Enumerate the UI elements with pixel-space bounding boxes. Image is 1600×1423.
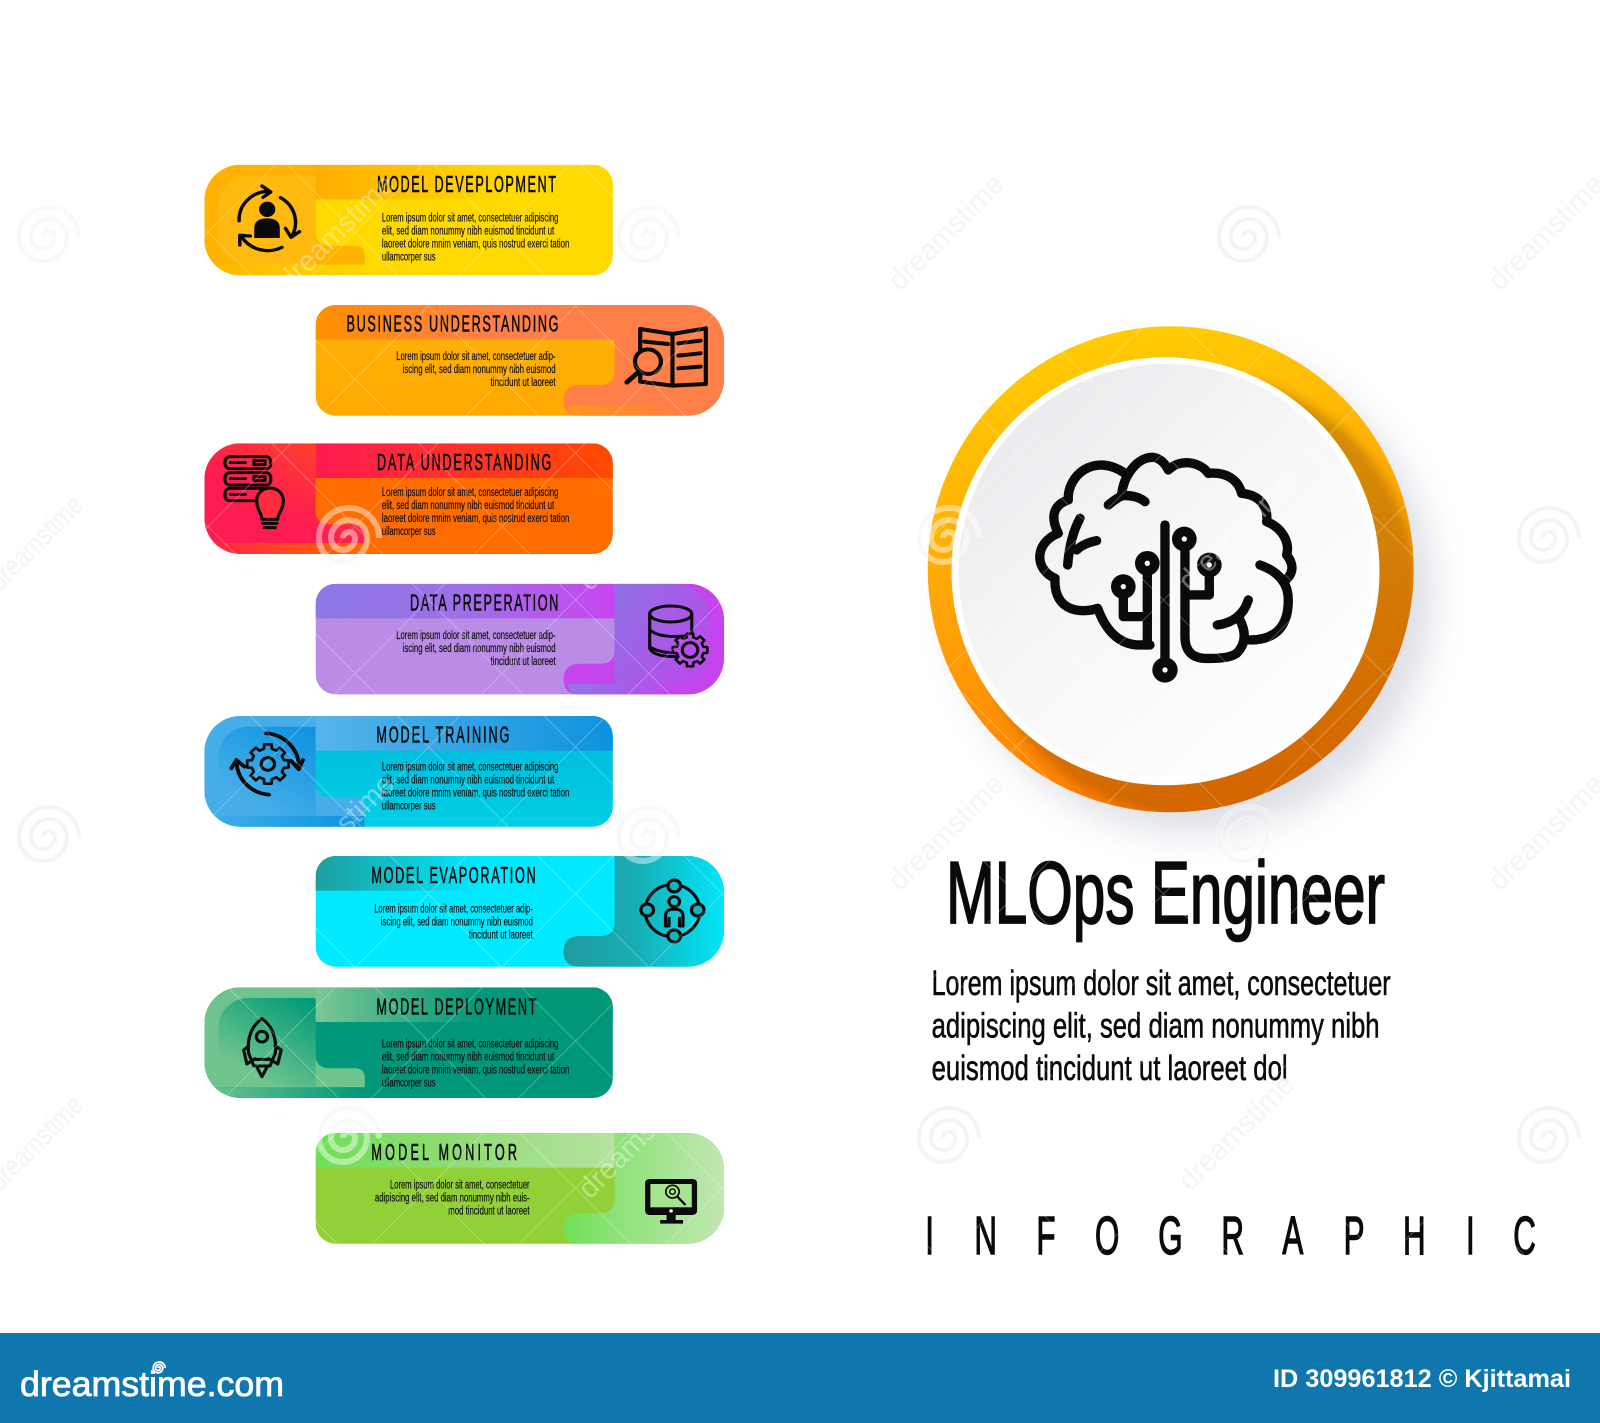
icon: gear with cycle arrows	[231, 733, 303, 795]
text block: laoreet dolore mnim veniam, quis nostrud exerci tation	[382, 1064, 569, 1076]
icon: servers with light bulb	[225, 457, 283, 528]
text: dreamstime	[1172, 1068, 1301, 1197]
heading: MODEL MONITOR	[371, 1139, 517, 1165]
icon: person with connected nodes	[641, 880, 704, 942]
text block: iscing elit, sed diam nonummy nibh euismod	[403, 364, 556, 376]
text: dreamstime	[572, 468, 701, 597]
panel: model deployment	[204, 987, 614, 1098]
text: dreamstime	[1172, 468, 1301, 597]
icon: open book with magnifier	[627, 328, 706, 386]
footer credit: ID 309961812 © Kjittamai	[1273, 1365, 1571, 1393]
text block: ullamcorper sus	[382, 801, 436, 813]
text block	[396, 351, 556, 389]
text block	[374, 903, 533, 941]
circular brain badge	[928, 326, 1432, 832]
text block: tincidunt ut laoreet	[491, 377, 556, 389]
icon: rocket	[244, 1019, 281, 1077]
heading: MODEL EVAPORATION	[371, 862, 536, 888]
text block: elit, sed diam nonummy nibh euismod tincidunt ut	[382, 1051, 555, 1063]
icon: brain with circuit	[1040, 457, 1292, 683]
text block: tincidunt ut laoreet	[491, 656, 556, 668]
text: dreamstime	[572, 1076, 701, 1205]
text block: Lorem ipsum dolor sit amet, consectetuer adipiscing	[382, 213, 558, 225]
description text: euismod tincidunt ut laoreet dol	[932, 1049, 1288, 1088]
footer logo: dreamstime.com	[20, 1365, 284, 1404]
panel: data preperation	[316, 584, 725, 695]
text block: elit, sed diam nonummy nibh euismod tincidunt ut	[382, 775, 555, 787]
panel: model evaporation	[316, 856, 725, 967]
title: MLOps Engineer	[946, 843, 1385, 942]
text block	[382, 487, 569, 538]
icon: monitor with magnifier	[645, 1179, 697, 1224]
panel: data understanding	[204, 443, 614, 554]
description text: Lorem ipsum dolor sit amet, consectetuer	[932, 964, 1391, 1003]
panel: business understanding	[316, 305, 725, 416]
text block	[382, 762, 569, 813]
text block: Lorem ipsum dolor sit amet, consectetuer	[390, 1179, 530, 1191]
footer bar	[0, 1333, 1600, 1423]
text block: ullamcorper sus	[382, 252, 436, 264]
text block	[382, 213, 569, 264]
description text: adipiscing elit, sed diam nonummy nibh	[932, 1006, 1380, 1046]
text block: adipiscing elit, sed diam nonummy nibh euis-	[375, 1192, 530, 1204]
text block: iscing elit, sed diam nonummy nibh euismod	[403, 643, 556, 655]
text: dreamstime	[882, 168, 1011, 297]
heading: MODEL DEPLOYMENT	[376, 993, 536, 1019]
text block: tincidunt ut laoreet	[469, 929, 533, 941]
badge drop shadow	[952, 352, 1432, 832]
badge ring	[928, 326, 1414, 812]
heading: MODEL TRAINING	[376, 722, 509, 748]
text block: Lorem ipsum dolor sit amet, consectetuer adipiscing	[382, 1038, 558, 1050]
text block: laoreet dolore mnim veniam, quis nostrud exerci tation	[382, 513, 569, 525]
icon: person in cycle	[239, 186, 299, 251]
panel: model development	[204, 165, 614, 276]
description text	[932, 964, 1391, 1088]
text block: Lorem ipsum dolor sit amet, consectetuer adip-	[396, 351, 556, 363]
text block: Lorem ipsum dolor sit amet, consectetuer adip-	[374, 903, 533, 915]
heading: DATA UNDERSTANDING	[377, 449, 551, 475]
text block: elit, sed diam nonummy nibh euismod tincidunt ut	[382, 226, 555, 238]
text block	[382, 1038, 569, 1089]
text block	[396, 630, 556, 668]
badge face	[952, 357, 1380, 785]
text block: mod tincidunt ut laoreet	[448, 1205, 530, 1217]
text block	[375, 1179, 530, 1217]
text block: laoreet dolore mnim veniam, quis nostrud exerci tation	[382, 788, 569, 800]
text: dreamstime	[882, 768, 1011, 897]
text block: Lorem ipsum dolor sit amet, consectetuer adipiscing	[382, 487, 558, 499]
heading: MODEL DEVEPLOPMENT	[377, 171, 556, 197]
icon: database with gear	[650, 606, 707, 666]
heading: BUSINESS UNDERSTANDING	[347, 311, 559, 337]
panel: model monitor	[316, 1133, 725, 1244]
text block: ullamcorper sus	[382, 526, 436, 538]
infographic label: INFOGRAPHIC	[925, 1206, 1536, 1266]
text: dreamstime	[272, 768, 401, 897]
text block: elit, sed diam nonummy nibh euismod tincidunt ut	[382, 500, 555, 512]
panel: model training	[204, 716, 614, 827]
text block: Lorem ipsum dolor sit amet, consectetuer adipiscing	[382, 762, 558, 774]
text block: ullamcorper sus	[382, 1077, 436, 1089]
heading: DATA PREPERATION	[410, 589, 558, 615]
text block: iscing elit, sed diam nonummy nibh euismod	[381, 916, 533, 928]
text: dreamstime	[272, 168, 401, 297]
text block: Lorem ipsum dolor sit amet, consectetuer adip-	[396, 630, 556, 642]
text block: laoreet dolore mnim veniam, quis nostrud exerci tation	[382, 239, 569, 251]
